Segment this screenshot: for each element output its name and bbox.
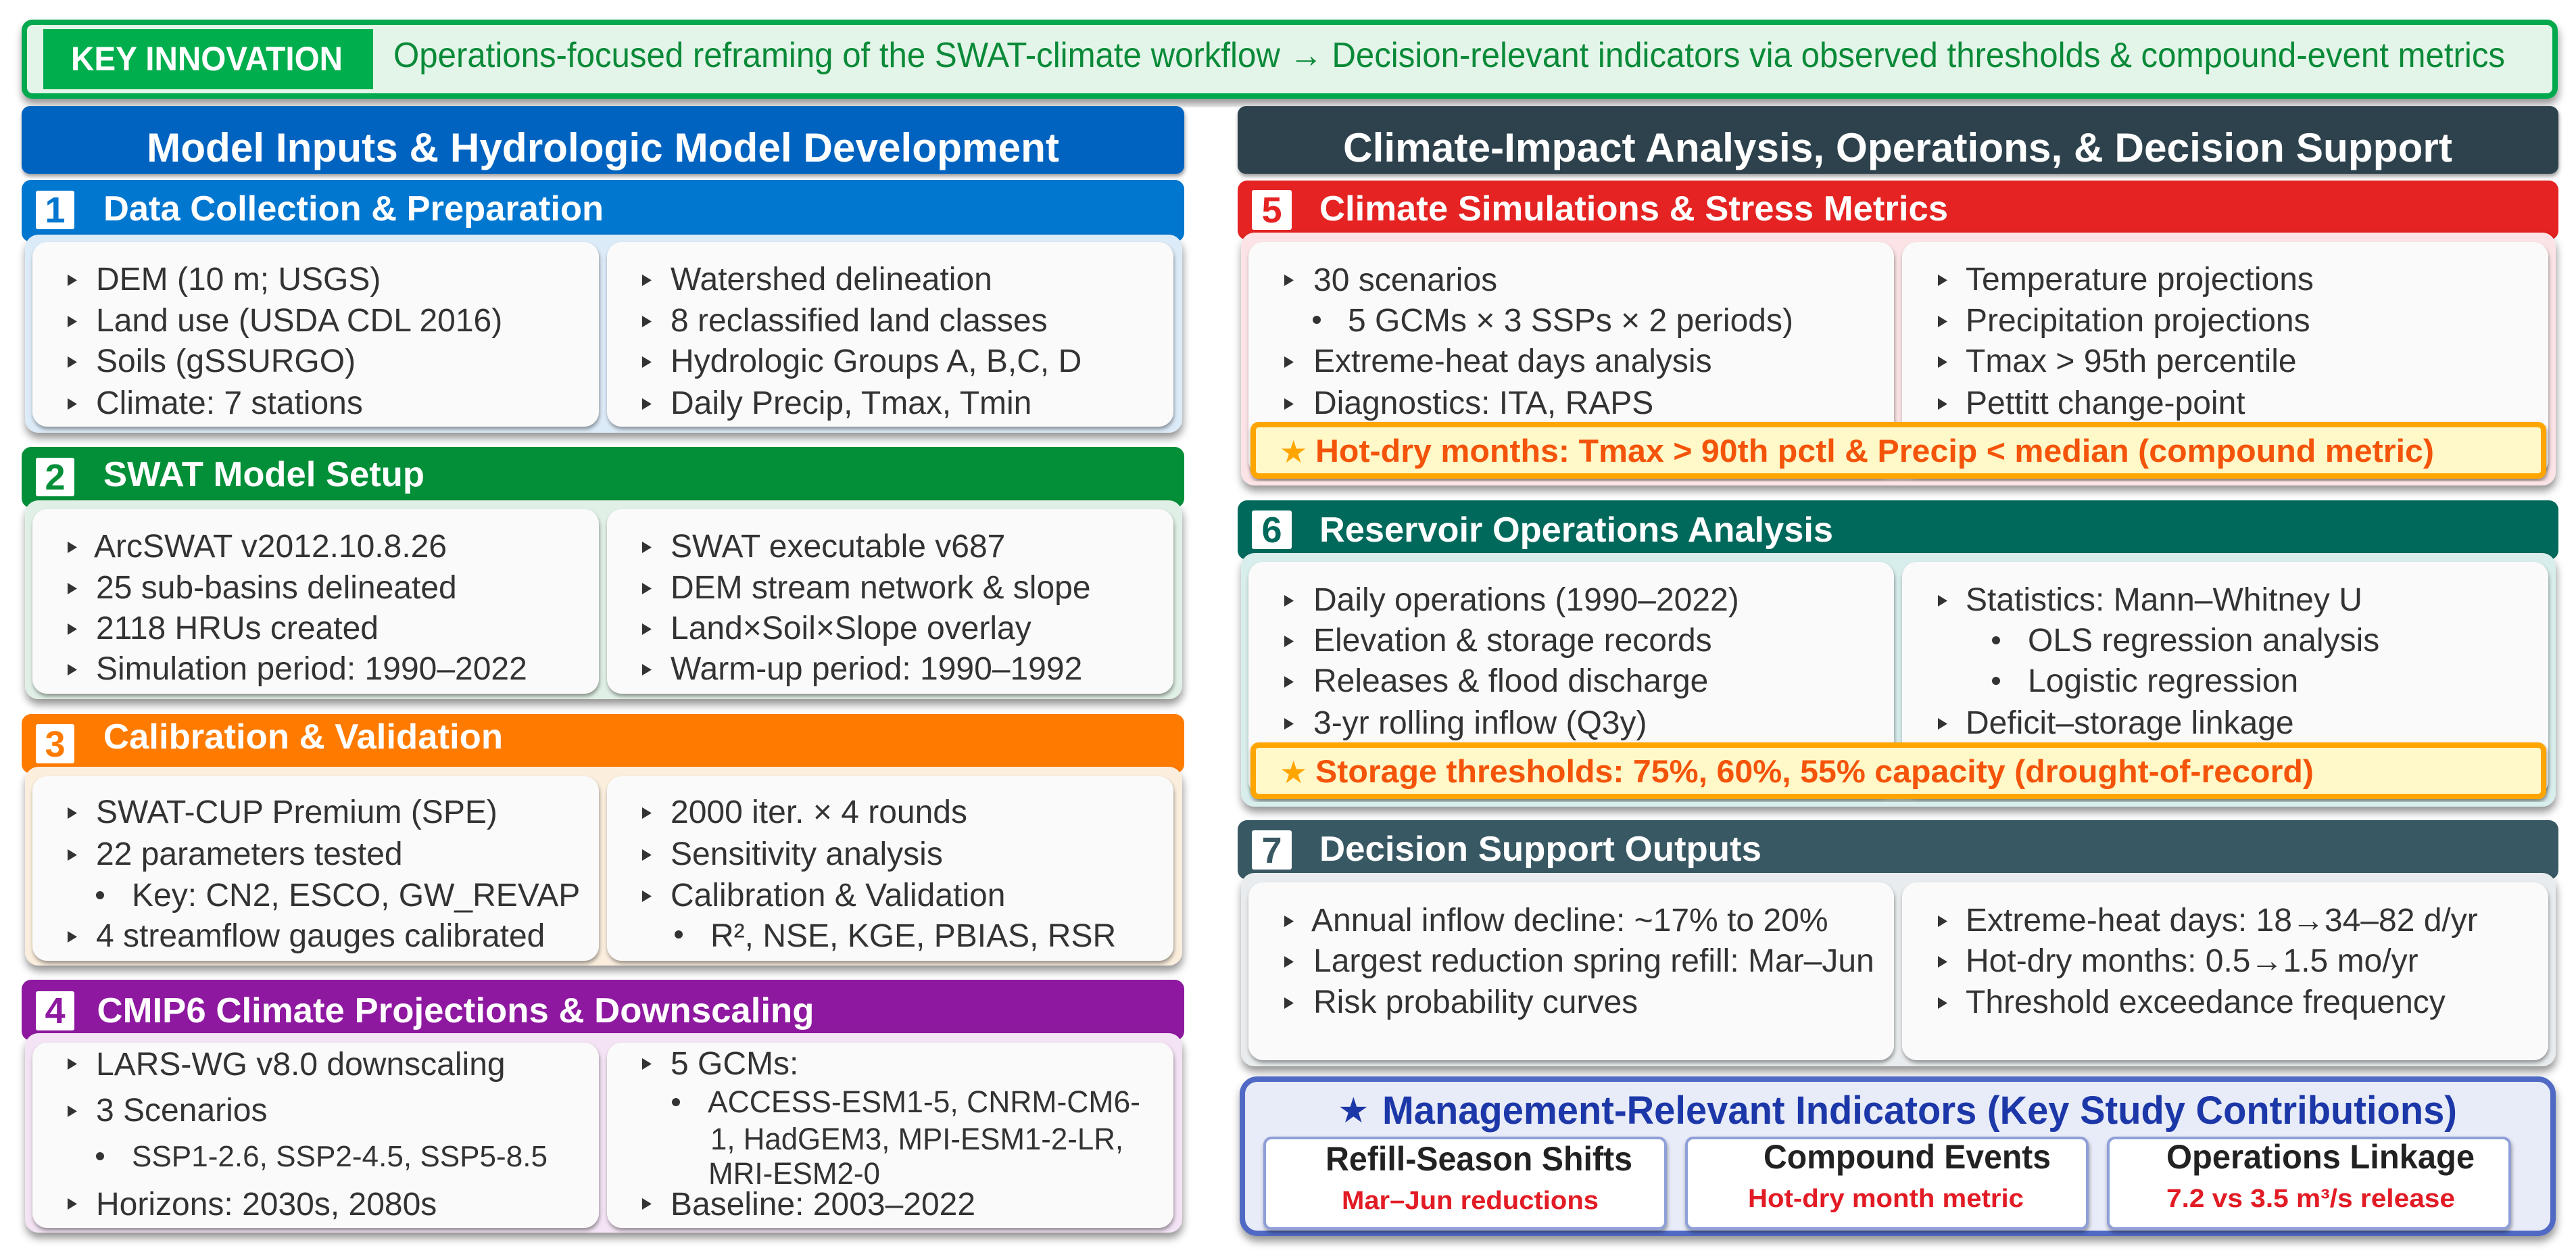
card: swat setup left: 2118 HRUs created: [96, 611, 379, 646]
card: risk outputs: Threshold exceedance frequency: [1966, 984, 2446, 1020]
card: statistics: Statistics: Mann–Whitney U: [1966, 582, 2362, 618]
callout: storage thresholds: ★: [1280, 754, 1307, 790]
card: downscaling right: [607, 1043, 1173, 1228]
card: swat setup right: Warm-up period: 1990–1992: [671, 651, 1082, 687]
card: calibration left: 22 parameters tested: [96, 836, 403, 872]
card: data sources: DEM (10 m; USGS): [96, 262, 381, 298]
card: calibration right: Sensitivity analysis: [671, 836, 943, 872]
card: operations records: Daily operations (1990–2022): [1313, 582, 1739, 618]
card: inflow outputs: Largest reduction spring refill: Mar–Jun: [1313, 943, 1874, 979]
card: downscaling left: LARS-WG v8.0 downscaling: [96, 1047, 506, 1083]
card: risk outputs: [1902, 882, 2548, 1060]
card: climate scenarios: 5 GCMs × 3 SSPs × 2 periods): [1348, 303, 1793, 339]
card: calibration right: Calibration & Validation: [671, 878, 1005, 913]
card: swat setup right: SWAT executable v687: [671, 529, 1005, 565]
card: operations records: Releases & flood discharge: [1313, 663, 1708, 699]
indicator: operations linkage: [2108, 1138, 2510, 1229]
card: data processing: Daily Precip, Tmax, Tmin: [671, 385, 1031, 421]
section title 6: Reservoir Operations Analysis: [1319, 510, 1833, 550]
panel: 6 reservoir operations analysis: [1238, 500, 2558, 807]
section title 5: Climate Simulations & Stress Metrics: [1319, 189, 1948, 229]
heading: left column: Model Inputs & Hydrologic Model Development: [147, 125, 1059, 170]
badge 2: [36, 457, 74, 498]
card: data sources: Soils (gSSURGO): [96, 343, 356, 379]
indicators heading: Management-Relevant Indicators (Key Study Contributions): [1382, 1089, 2457, 1133]
card: calibration left: [32, 776, 599, 961]
badge 4: [36, 991, 74, 1031]
badge 1: [36, 190, 74, 231]
card: climate scenarios: [1248, 242, 1894, 475]
card: risk outputs: Hot-dry months: 0.5→1.5 mo/yr: [1966, 943, 2419, 979]
badge 3: 3: [45, 724, 66, 765]
card: calibration left: 4 streamflow gauges calibrated: [96, 918, 545, 954]
card: swat setup left: ArcSWAT v2012.10.8.26: [94, 529, 447, 565]
card: statistics: Deficit–storage linkage: [1966, 705, 2294, 741]
indicator: refill-season shifts: Mar–Jun reductions: [1342, 1187, 1599, 1215]
indicator: refill-season shifts: [1265, 1138, 1666, 1229]
card: risk outputs: Extreme-heat days: 18→34–82 d/yr: [1966, 903, 2478, 939]
heading: right column: Climate-Impact Analysis, Operations, & Decision Support: [1343, 125, 2452, 170]
callout: hot-dry months: [1253, 425, 2544, 476]
section title 4: CMIP6 Climate Projections & Downscaling: [97, 991, 814, 1030]
card: inflow outputs: Risk probability curves: [1313, 984, 1638, 1020]
card: data processing: Watershed delineation: [671, 262, 992, 298]
card: climate scenarios: Diagnostics: ITA, RAPS: [1313, 385, 1653, 421]
card: downscaling right: Baseline: 2003–2022: [671, 1187, 975, 1222]
card: statistics: Logistic regression: [2028, 663, 2298, 699]
key innovation statement: Operations-focused reframing of the SWAT-climate workflow → Decision-relevant indicators via observed thresholds & compound-event metrics: [393, 36, 2505, 75]
card: projections: Temperature projections: [1966, 262, 2314, 298]
heading: right column: [1238, 106, 2558, 174]
indicator: compound events: Hot-dry month metric: [1748, 1185, 2024, 1213]
card: data processing: 8 reclassified land classes: [671, 303, 1048, 339]
card: projections: [1902, 242, 2548, 475]
callout: storage thresholds: [1253, 745, 2544, 797]
card: data sources: [32, 242, 599, 427]
card: downscaling right: 1, HadGEM3, MPI-ESM1-2-LR,: [710, 1122, 1123, 1156]
badge 5: 5: [1261, 190, 1282, 231]
badge 4: 4: [45, 991, 66, 1031]
card: climate scenarios: Extreme-heat days analysis: [1313, 343, 1712, 379]
badge 7: [1252, 830, 1292, 871]
key innovation label: KEY INNOVATION: [71, 40, 343, 78]
card: climate scenarios: 30 scenarios: [1313, 262, 1497, 298]
card: projections: Pettitt change-point: [1966, 385, 2245, 421]
card: swat setup left: 25 sub-basins delineated: [96, 570, 457, 606]
card: calibration right: 2000 iter. × 4 rounds: [671, 794, 967, 830]
card: calibration left: Key: CN2, ESCO, GW_REVAP: [132, 878, 580, 913]
card: downscaling right: 5 GCMs:: [671, 1046, 798, 1082]
card: statistics: [1902, 562, 2548, 796]
card: inflow outputs: [1248, 882, 1894, 1060]
badge 6: [1252, 510, 1292, 550]
card: data processing: [607, 242, 1173, 427]
card: inflow outputs: Annual inflow decline: ~17% to 20%: [1311, 903, 1828, 939]
panel: 3 calibration and validation: [22, 714, 1184, 966]
callout: storage thresholds: Storage thresholds: 75%, 60%, 55% capacity (drought-of-record): [1315, 753, 2314, 789]
panel: 7 decision support outputs: [1238, 820, 2558, 1066]
section title 3: Calibration & Validation: [103, 717, 503, 757]
card: calibration right: R², NSE, KGE, PBIAS, RSR: [710, 918, 1116, 954]
badge 6: 6: [1261, 510, 1282, 550]
key innovation label: [43, 29, 373, 89]
indicator: refill-season shifts: Refill-Season Shifts: [1326, 1140, 1632, 1178]
card: swat setup left: Simulation period: 1990–2022: [96, 651, 527, 687]
card: downscaling right: ACCESS-ESM1-5, CNRM-CM6-: [708, 1085, 1140, 1119]
card: data processing: Hydrologic Groups A, B,C, D: [671, 343, 1082, 379]
section title 1: Data Collection & Preparation: [103, 189, 604, 229]
card: downscaling left: [32, 1043, 599, 1228]
badge 7: 7: [1261, 830, 1282, 871]
indicator: compound events: Compound Events: [1764, 1138, 2051, 1176]
indicator: operations linkage: Operations Linkage: [2166, 1138, 2475, 1176]
callout: hot-dry months: ★: [1280, 433, 1307, 470]
section title 7: Decision Support Outputs: [1319, 830, 1761, 869]
indicators heading: ★: [1338, 1091, 1369, 1131]
card: operations records: 3-yr rolling inflow (Q3y): [1313, 705, 1647, 741]
card: operations records: [1248, 562, 1894, 796]
card: swat setup left: [32, 509, 599, 694]
badge 1: 1: [45, 190, 66, 231]
card: swat setup right: Land×Soil×Slope overlay: [671, 611, 1031, 646]
card: operations records: Elevation & storage records: [1313, 623, 1712, 659]
panel: management-relevant indicators: [1242, 1079, 2553, 1233]
panel: 2 swat model setup: [22, 447, 1184, 699]
card: statistics: OLS regression analysis: [2028, 623, 2379, 659]
banner: key innovation: [24, 22, 2555, 96]
badge 2: 2: [45, 457, 66, 498]
card: calibration left: SWAT-CUP Premium (SPE): [96, 794, 497, 830]
badge 3: [36, 724, 74, 765]
heading: left column: [22, 106, 1184, 174]
card: projections: Precipitation projections: [1966, 303, 2310, 339]
indicator: compound events: [1686, 1138, 2087, 1229]
card: downscaling left: SSP1-2.6, SSP2-4.5, SSP5-8.5: [132, 1140, 548, 1173]
badge 5: [1252, 190, 1292, 231]
panel: 5 climate simulations and stress metrics: [1238, 181, 2558, 485]
card: downscaling left: 3 Scenarios: [96, 1093, 267, 1129]
card: projections: Tmax > 95th percentile: [1966, 343, 2297, 379]
callout: hot-dry months: Hot-dry months: Tmax > 90th pctl & Precip < median (compound metric): [1315, 433, 2434, 469]
card: downscaling right: MRI-ESM2-0: [708, 1156, 880, 1191]
card: data sources: Climate: 7 stations: [96, 385, 363, 421]
section title 2: SWAT Model Setup: [103, 455, 424, 494]
indicator: operations linkage: 7.2 vs 3.5 m³/s release: [2166, 1185, 2455, 1213]
panel: 4 cmip6 climate projections and downscaling: [22, 980, 1184, 1233]
card: downscaling left: Horizons: 2030s, 2080s: [96, 1187, 437, 1222]
card: swat setup right: DEM stream network & slope: [671, 570, 1091, 606]
panel: 1 data collection and preparation: [22, 180, 1184, 433]
card: calibration right: [607, 776, 1173, 961]
card: swat setup right: [607, 509, 1173, 694]
card: data sources: Land use (USDA CDL 2016): [96, 303, 502, 339]
